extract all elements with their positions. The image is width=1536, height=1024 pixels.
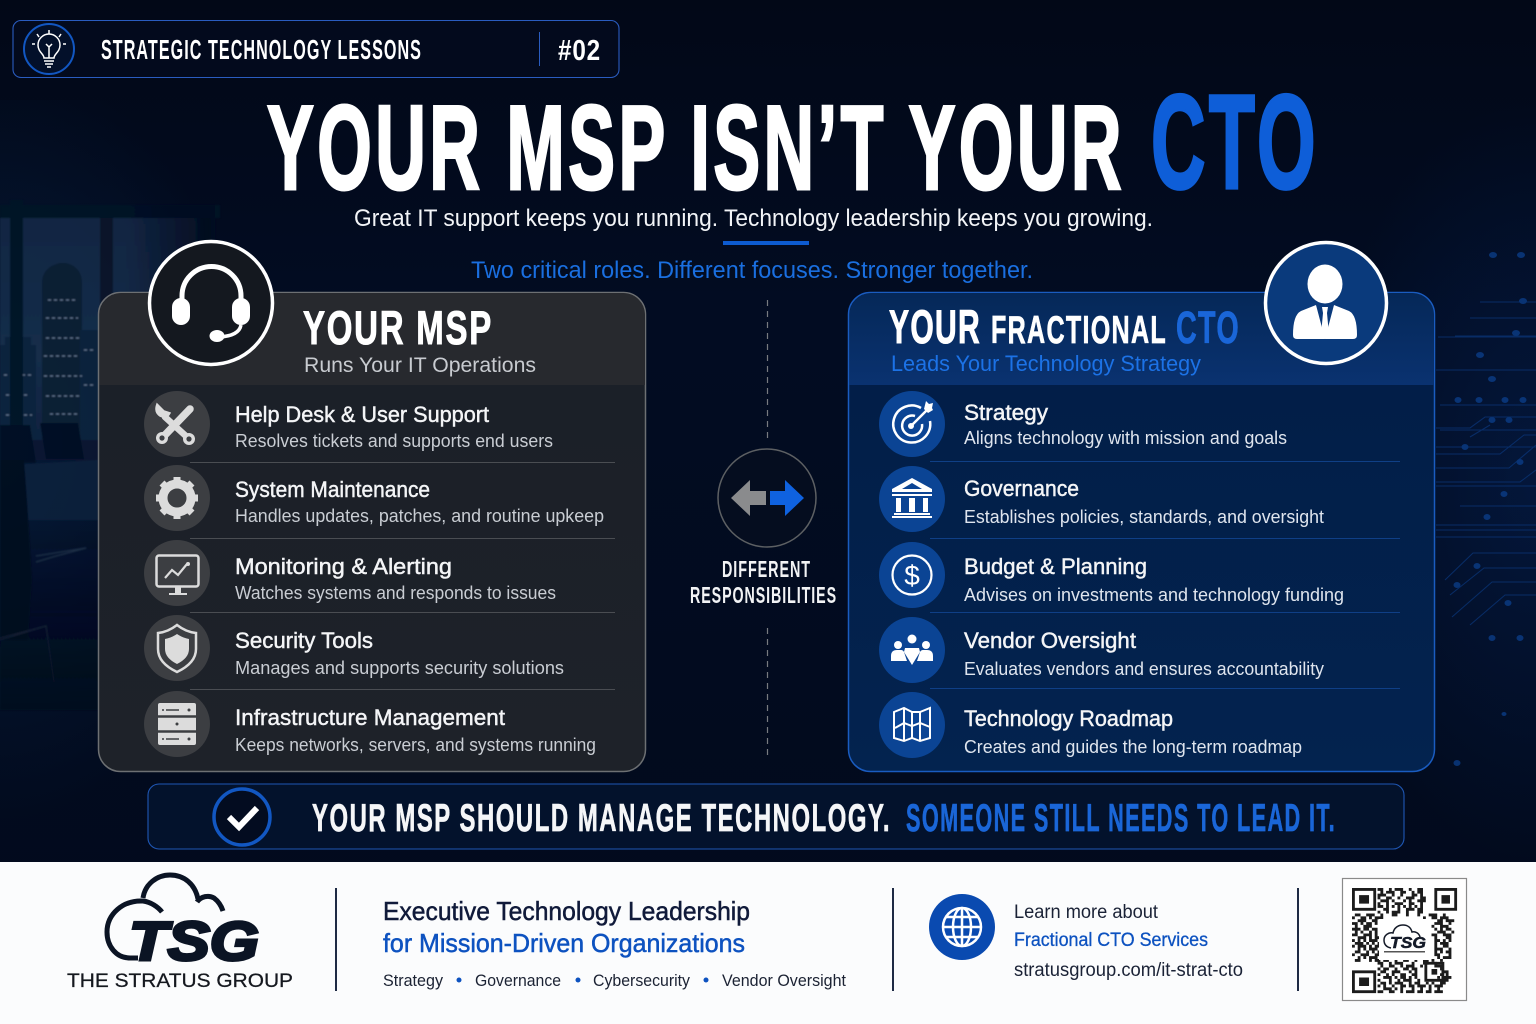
icon: globe: [929, 894, 995, 960]
item: budget: [879, 542, 945, 608]
panel: your fractional CTO: [848, 242, 1434, 772]
footer: [0, 862, 1536, 1024]
badge label: STRATEGIC TECHNOLOGY LESSONS: [101, 34, 422, 65]
text: security tools: Security Tools: [235, 628, 373, 653]
icon: headset: [150, 242, 272, 364]
label: [690, 556, 837, 608]
footer services list: Governance: [475, 971, 561, 990]
footer services list: Strategy: [383, 971, 443, 990]
text: system maintenance: System Maintenance: [235, 477, 430, 502]
text: help desk: Resolves tickets and supports end users: [235, 431, 553, 451]
item: help desk: [144, 391, 210, 457]
text: monitoring: Monitoring & Alerting: [235, 554, 452, 579]
text: vendor oversight: Evaluates vendors and ensures accountability: [964, 659, 1324, 679]
QR code: [1342, 878, 1466, 1000]
text: infrastructure: [235, 705, 596, 755]
subtitle: Great IT support keeps you running. Technology leadership keeps you growing.: [354, 205, 1153, 232]
text: budget: Advises on investments and technology funding: [964, 585, 1344, 605]
text: help desk: Help Desk & User Support: [235, 402, 489, 427]
footer services list: Vendor Oversight: [722, 971, 846, 990]
item: vendor oversight: [879, 617, 945, 683]
text: system maintenance: Handles updates, patches, and routine upkeep: [235, 506, 604, 526]
tagline: Two critical roles. Different focuses. Stronger together.: [471, 257, 1033, 284]
text: governance: Establishes policies, standards, and oversight: [964, 507, 1324, 527]
text: security tools: [235, 628, 564, 678]
label: RESPONSIBILITIES: [690, 582, 837, 608]
footer heading: Executive Technology Leadership: [383, 896, 750, 926]
text: monitoring: [235, 554, 556, 603]
panel heading: YOUR: [889, 300, 981, 353]
panel heading: FRACTIONAL: [991, 309, 1167, 352]
QR centre logo: TSG: [1390, 935, 1426, 952]
label: DIFFERENT: [722, 556, 811, 582]
text: technology roadmap: Creates and guides the long-term roadmap: [964, 737, 1302, 757]
panel heading: [889, 300, 1240, 353]
title: CTO: [1151, 68, 1319, 217]
text: strategy: Aligns technology with mission and goals: [964, 428, 1287, 448]
item: technology roadmap: [879, 692, 945, 758]
item: monitoring: [144, 540, 210, 606]
panel heading: CTO: [1176, 302, 1240, 353]
logo: The Stratus Group: TSG: [129, 910, 259, 972]
center divider: different responsibilities: [690, 300, 837, 760]
footer services list: [383, 971, 846, 990]
item: budget: $: [904, 560, 920, 591]
text: technology roadmap: [964, 706, 1302, 757]
series badge: [13, 20, 619, 78]
text: governance: Governance: [964, 476, 1079, 501]
badge number: #02: [558, 35, 601, 67]
footer heading: [383, 896, 750, 958]
panel: your MSP: [98, 242, 646, 772]
logo: The Stratus Group: [67, 875, 293, 992]
text: monitoring: Watches systems and responds to issues: [235, 583, 556, 603]
footer heading: for Mission-Driven Organizations: [383, 928, 745, 958]
link block: Learn more about: [1014, 902, 1159, 923]
text: vendor oversight: Vendor Oversight: [964, 628, 1136, 653]
footer services list: Cybersecurity: [593, 971, 690, 990]
text: help desk: [235, 402, 553, 451]
link block: stratusgroup.com/it-strat-cto: [1014, 960, 1243, 981]
text: vendor oversight: [964, 628, 1324, 679]
takeaway banner: [148, 784, 1404, 849]
text: security tools: Manages and supports security solutions: [235, 658, 564, 678]
text: governance: [964, 476, 1324, 527]
link block: Fractional CTO Services: [1014, 930, 1208, 951]
icon: opposing arrows: [718, 449, 816, 547]
link block: [1014, 902, 1243, 981]
icon: check mark: [214, 789, 270, 845]
item: system maintenance: [144, 465, 210, 531]
item: infrastructure: [144, 691, 210, 757]
text: budget: [964, 554, 1344, 605]
banner text: YOUR MSP SHOULD MANAGE TECHNOLOGY.: [312, 797, 891, 840]
panel subheading: Runs Your IT Operations: [304, 354, 536, 377]
logo: The Stratus Group: THE STRATUS GROUP: [67, 971, 293, 992]
text: technology roadmap: Technology Roadmap: [964, 706, 1173, 731]
panel subheading: Leads Your Technology Strategy: [891, 351, 1201, 376]
item: strategy: [879, 391, 945, 457]
text: strategy: Strategy: [964, 400, 1048, 425]
panel heading: YOUR MSP: [303, 301, 493, 354]
icon: light bulb: [24, 24, 74, 74]
text: strategy: [964, 400, 1287, 448]
item: security tools: [144, 615, 210, 681]
text: infrastructure: Infrastructure Management: [235, 705, 505, 730]
accent bar: [723, 241, 809, 245]
icon: executive person: [1266, 242, 1386, 364]
text: system maintenance: [235, 477, 604, 526]
background: office window with city skyline: [0, 200, 220, 710]
text: infrastructure: Keeps networks, servers, and systems running: [235, 735, 596, 755]
background: circuit board traces: [1436, 252, 1536, 766]
text: budget: Budget & Planning: [964, 554, 1147, 579]
item: governance: [879, 466, 945, 532]
